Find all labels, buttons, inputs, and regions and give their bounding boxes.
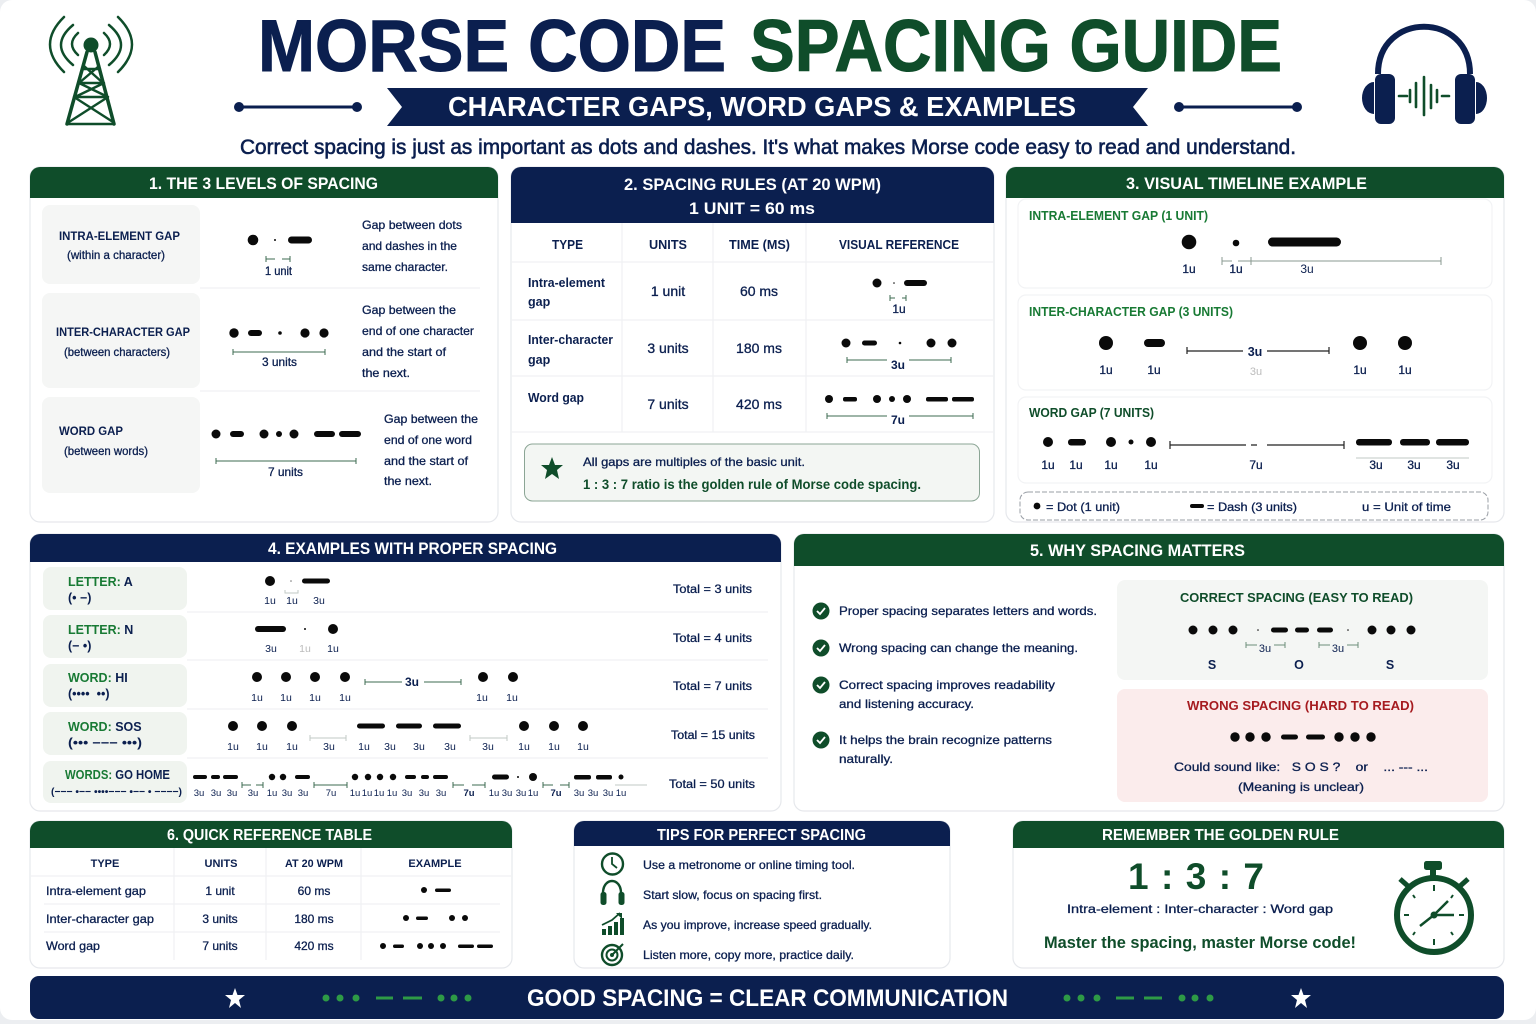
row: intra-element gap (46, 884, 451, 898)
row: inter-character (528, 333, 956, 372)
row: inter-character gap: end of one character (362, 324, 474, 338)
row: inter-character gap: 180 ms (294, 912, 334, 926)
row: intra-element gap: same character. (362, 260, 448, 274)
timeline: word gap: 1u (1104, 458, 1118, 472)
example: words GO HOME: 3u (194, 788, 204, 799)
row: intra-element: Intra-element (528, 276, 606, 290)
example: words GO HOME: 3u (298, 788, 308, 799)
correct spacing box: S (1208, 658, 1216, 672)
subtitle ribbon: CHARACTER GAPS, WORD GAPS & EXAMPLES (448, 91, 1076, 122)
row: word gap: 7 units (268, 465, 303, 479)
panel 4 header: 4. EXAMPLES WITH PROPER SPACING (268, 540, 557, 558)
example: words GO HOME: 3u (248, 788, 258, 799)
morse decoration right (1064, 994, 1214, 1002)
tips header: TIPS FOR PERFECT SPACING (657, 827, 866, 844)
example: word HI: 1u (476, 692, 488, 704)
decorative line left (234, 102, 362, 112)
example: words GO HOME: 7u (463, 788, 475, 799)
example: words GO HOME: 1u (616, 788, 626, 799)
example: letter A: 1u (286, 595, 298, 607)
wrong spacing box: (Meaning is unclear) (1238, 780, 1364, 794)
row: word gap: 420 ms (736, 396, 782, 412)
row: intra-element: gap (528, 295, 551, 309)
icon: growth chart (602, 913, 624, 935)
timeline: intra-element gap (1018, 199, 1492, 288)
example: words GO HOME: 3u (211, 788, 221, 799)
timeline: inter-character gap: 1u (1353, 363, 1367, 377)
row: intra-element gap: 1 unit (205, 884, 235, 898)
row: intra-element gap: Gap between dots (362, 218, 462, 232)
wrong spacing box: Could sound like: S O S ? or ... --- ... (1174, 760, 1428, 774)
example: words GO HOME: 1u (362, 788, 372, 799)
timeline: word gap: 3u (1446, 458, 1460, 472)
row: inter-character: 3u (891, 358, 905, 372)
example: words GO HOME (43, 761, 755, 803)
legend (1020, 492, 1488, 520)
icon: stopwatch (1397, 861, 1471, 952)
row: word gap: 7 units (202, 939, 238, 953)
example: word SOS: 1u (518, 741, 530, 753)
slogan: Master the spacing, master Morse code! (1044, 933, 1356, 952)
example: word SOS: Total = 15 units (671, 728, 755, 742)
example: word SOS: 3u (413, 741, 425, 753)
example: word HI: WORD: HI (68, 671, 128, 685)
row: intra-element gap: INTRA-ELEMENT GAP (59, 229, 180, 243)
table header row (552, 237, 959, 252)
timeline: intra-element gap: 3u (1300, 262, 1314, 276)
example: word HI: 1u (309, 692, 321, 704)
row: intra-element gap: Intra-element gap (46, 884, 146, 898)
row: intra-element gap (42, 205, 462, 284)
example: word SOS: 3u (384, 741, 396, 753)
table header row: UNITS (204, 858, 238, 870)
ratio: 1 : 3 : 7 (1128, 856, 1264, 897)
row: inter-character gap (42, 293, 474, 388)
example: word SOS: 3u (482, 741, 494, 753)
row: word gap (528, 391, 974, 427)
checklist: naturally. (839, 752, 893, 766)
icon: star right (1291, 988, 1311, 1008)
checklist: and listening accuracy. (839, 697, 974, 711)
correct spacing box: 3u (1259, 643, 1271, 655)
row: inter-character gap: Gap between the (362, 303, 456, 317)
row: inter-character: Inter-character (528, 333, 613, 347)
icon: headphones with sound wave (1362, 27, 1487, 124)
example: words GO HOME: 7u (550, 788, 562, 799)
example: words GO HOME: 1u (528, 788, 538, 799)
panel 5 header: 5. WHY SPACING MATTERS (1030, 542, 1245, 560)
row: word gap (46, 939, 493, 953)
timeline: word gap: 1u (1144, 458, 1158, 472)
panel: examples with proper spacing (30, 534, 781, 811)
timeline: inter-character gap: 1u (1147, 363, 1161, 377)
example: letter N (43, 615, 752, 658)
panel: tips for perfect spacing (574, 821, 950, 968)
example: letter A: LETTER: A (68, 575, 133, 589)
panel 4 header (30, 534, 781, 562)
panel 1 header (30, 167, 498, 198)
timeline: word gap: 3u (1407, 458, 1421, 472)
example: words GO HOME: 3u (402, 788, 412, 799)
row: word gap: 7u (891, 413, 905, 427)
ratio caption: Intra-element : Inter-character : Word gap (1067, 902, 1333, 916)
example: letter N: 1u (327, 643, 339, 655)
icon: headset (600, 881, 624, 905)
panel: visual timeline example (1006, 167, 1504, 522)
morse decoration left (322, 994, 472, 1002)
row: word gap (42, 397, 478, 493)
tip text 3: As you improve, increase speed gradually. (643, 918, 872, 932)
row: intra-element: 1 unit (651, 283, 685, 299)
golden rule header: REMEMBER THE GOLDEN RULE (1102, 827, 1339, 844)
example: word HI: Total = 7 units (673, 679, 752, 693)
row: intra-element gap: 1 unit (265, 264, 293, 278)
example: letter A: 1u (264, 595, 276, 607)
example: word HI: 1u (280, 692, 292, 704)
correct spacing box: O (1294, 658, 1304, 672)
row: word gap: end of one word (384, 433, 472, 447)
golden rule header (1013, 821, 1504, 848)
row: intra-element gap: 60 ms (298, 884, 330, 898)
row: inter-character gap: Inter-character gap (46, 912, 154, 926)
example: words GO HOME: 1u (489, 788, 499, 799)
panel 2 header: 2. SPACING RULES (AT 20 WPM) (624, 175, 881, 194)
panel: the 3 levels of spacing (30, 167, 498, 522)
table header row: TYPE (552, 237, 583, 252)
example: word SOS: 1u (548, 741, 560, 753)
table header row: VISUAL REFERENCE (839, 237, 959, 252)
intro text: Correct spacing is just as important as dots and dashes. It's what makes Morse code easy to read and understand. (240, 135, 1296, 159)
row: word gap: Gap between the (384, 412, 478, 426)
table header row: AT 20 WPM (285, 858, 343, 870)
panel 1 header: 1. THE 3 LEVELS OF SPACING (149, 174, 378, 193)
panel: spacing rules (511, 167, 994, 522)
example: letter A: 3u (313, 595, 325, 607)
correct spacing box: S (1386, 658, 1394, 672)
icon: star left (225, 988, 245, 1008)
subtitle ribbon (387, 88, 1148, 126)
example: word SOS: 1u (577, 741, 589, 753)
tip text 1: Use a metronome or online timing tool. (643, 858, 855, 872)
example: word HI: 3u (405, 675, 419, 689)
row: inter-character gap: INTER-CHARACTER GAP (56, 325, 190, 339)
example: word HI: 1u (251, 692, 263, 704)
checklist: It helps the brain recognize patterns (839, 733, 1052, 747)
example: letter N: 1u (299, 643, 311, 655)
example: words GO HOME: 1u (374, 788, 384, 799)
title (258, 6, 1282, 87)
panel 2 header (511, 167, 994, 223)
timeline: inter-character gap: 3u (1248, 345, 1262, 359)
icon: star (541, 457, 563, 479)
example: letter A (43, 567, 752, 610)
row: intra-element (528, 276, 927, 316)
wrong spacing box: WRONG SPACING (HARD TO READ) (1187, 698, 1414, 713)
title: MORSE CODE (258, 6, 726, 87)
timeline: inter-character gap (1018, 295, 1492, 390)
example: letter A: Total = 3 units (673, 582, 752, 596)
checklist: Wrong spacing can change the meaning. (839, 641, 1078, 655)
icon: clock (602, 854, 623, 874)
row: word gap: Word gap (528, 391, 584, 405)
correct spacing box: CORRECT SPACING (EASY TO READ) (1180, 590, 1413, 605)
example: words GO HOME: 3u (282, 788, 292, 799)
timeline: inter-character gap: 3u (1250, 366, 1262, 378)
timeline: word gap: 3u (1369, 458, 1383, 472)
row: word gap: 420 ms (294, 939, 334, 953)
example: words GO HOME: 3u (588, 788, 598, 799)
row: word gap: Word gap (46, 939, 100, 953)
row: inter-character gap: and the start of (362, 345, 447, 359)
example: words GO HOME: 7u (326, 788, 336, 799)
example: words GO HOME: 1u (387, 788, 397, 799)
row: intra-element gap: (within a character) (67, 248, 165, 262)
example: words GO HOME: Total = 50 units (669, 777, 755, 791)
row: word gap: 7 units (647, 396, 689, 412)
legend: = Dot (1 unit) (1046, 500, 1120, 514)
panel: quick reference table (30, 821, 512, 968)
row: inter-character gap (46, 912, 468, 926)
example: word SOS: 3u (323, 741, 335, 753)
timeline: intra-element gap: 1u (1182, 262, 1196, 276)
panel: why spacing matters (794, 534, 1504, 811)
example: words GO HOME: 3u (419, 788, 429, 799)
icon: radio tower (50, 17, 132, 124)
example: words GO HOME: 3u (436, 788, 446, 799)
row: intra-element: 60 ms (740, 283, 778, 299)
legend: u = Unit of time (1362, 500, 1451, 514)
example: word SOS: 1u (286, 741, 298, 753)
example: word SOS: WORD: SOS (68, 720, 142, 734)
timeline: word gap: WORD GAP (7 UNITS) (1029, 406, 1154, 420)
timeline: word gap: 1u (1069, 458, 1083, 472)
callout: golden rule note: 1 : 3 : 7 ratio is the golden rule of Morse code spacing. (583, 477, 921, 492)
example: words GO HOME: 1u (267, 788, 277, 799)
panel: remember the golden rule (1013, 821, 1504, 968)
timeline: intra-element gap: INTRA-ELEMENT GAP (1 UNIT) (1029, 209, 1208, 223)
example: word HI: 1u (506, 692, 518, 704)
panel 5 header (794, 534, 1504, 566)
example: word HI: 1u (339, 692, 351, 704)
example: letter N: Total = 4 units (673, 631, 752, 645)
row: inter-character gap: 3 units (262, 355, 297, 369)
panel 6 header: 6. QUICK REFERENCE TABLE (167, 827, 372, 844)
row: inter-character gap: the next. (362, 366, 410, 380)
example: word SOS: 3u (444, 741, 456, 753)
timeline: inter-character gap: 1u (1099, 363, 1113, 377)
correct spacing box (1117, 580, 1488, 680)
example: words GO HOME: 3u (603, 788, 613, 799)
example: letter N: (− •) (68, 639, 91, 653)
correct spacing box: 3u (1332, 643, 1344, 655)
row: word gap: (between words) (64, 444, 148, 458)
example: word SOS: 1u (358, 741, 370, 753)
legend: = Dash (3 units) (1207, 500, 1297, 514)
example: letter A: (• −) (68, 591, 91, 605)
panel 2 header: 1 UNIT = 60 ms (689, 199, 815, 218)
panel 6 header (30, 821, 512, 848)
tip text 4: Listen more, copy more, practice daily. (643, 948, 854, 962)
table header row (91, 858, 462, 870)
checklist (812, 602, 1097, 766)
checklist: Proper spacing separates letters and words. (839, 604, 1097, 618)
row: inter-character gap: (between characters) (64, 345, 170, 359)
row: word gap: the next. (384, 474, 432, 488)
panel 3 header (1006, 167, 1504, 198)
row: intra-element gap: and dashes in the (362, 239, 457, 253)
example: word SOS: (••• −−− •••) (68, 736, 142, 750)
table header row: TIME (MS) (729, 237, 790, 252)
row: inter-character: 3 units (647, 340, 689, 356)
table header row: EXAMPLE (408, 858, 462, 870)
example: word HI: (•••• ••) (68, 687, 110, 701)
example: letter N: LETTER: N (68, 623, 133, 637)
timeline: inter-character gap: 1u (1398, 363, 1412, 377)
row: word gap: WORD GAP (59, 424, 123, 438)
example: words GO HOME: (−−− •−− ••••−−− •−− • −−−−) (51, 786, 182, 798)
timeline: word gap: 1u (1041, 458, 1055, 472)
footer banner (30, 976, 1504, 1019)
timeline: intra-element gap: 1u (1229, 262, 1243, 276)
row: inter-character: 180 ms (736, 340, 782, 356)
example: words GO HOME: 3u (227, 788, 237, 799)
tip text 2: Start slow, focus on spacing first. (643, 888, 822, 902)
row: intra-element: 1u (892, 302, 906, 316)
panel 3 header: 3. VISUAL TIMELINE EXAMPLE (1126, 174, 1367, 193)
timeline: word gap (1018, 397, 1492, 483)
footer slogan: GOOD SPACING = CLEAR COMMUNICATION (527, 985, 1008, 1012)
example: words GO HOME: WORDS: GO HOME (65, 768, 170, 782)
example: words GO HOME: 3u (516, 788, 526, 799)
icon: target (602, 944, 623, 965)
example: word SOS: 1u (227, 741, 239, 753)
example: words GO HOME: 3u (502, 788, 512, 799)
row: inter-character: gap (528, 353, 551, 367)
title: SPACING GUIDE (750, 6, 1282, 87)
example: word SOS (43, 712, 755, 755)
example: letter N: 3u (265, 643, 277, 655)
timeline: inter-character gap: INTER-CHARACTER GAP (3 UNITS) (1029, 305, 1233, 319)
example: words GO HOME: 3u (574, 788, 584, 799)
row: word gap: and the start of (384, 454, 469, 468)
table header row: TYPE (91, 858, 119, 870)
callout: golden rule note (524, 444, 980, 501)
wrong spacing box (1117, 689, 1488, 802)
decorative line right (1174, 102, 1302, 112)
example: words GO HOME: 1u (350, 788, 360, 799)
callout: golden rule note: All gaps are multiples of the basic unit. (583, 455, 805, 469)
example: word HI (43, 664, 752, 707)
example: word SOS: 1u (256, 741, 268, 753)
row: inter-character gap: 3 units (202, 912, 238, 926)
timeline: word gap: 7u (1249, 458, 1263, 472)
checklist: Correct spacing improves readability (839, 678, 1055, 692)
tips header (574, 821, 950, 846)
table header row: UNITS (649, 237, 687, 252)
